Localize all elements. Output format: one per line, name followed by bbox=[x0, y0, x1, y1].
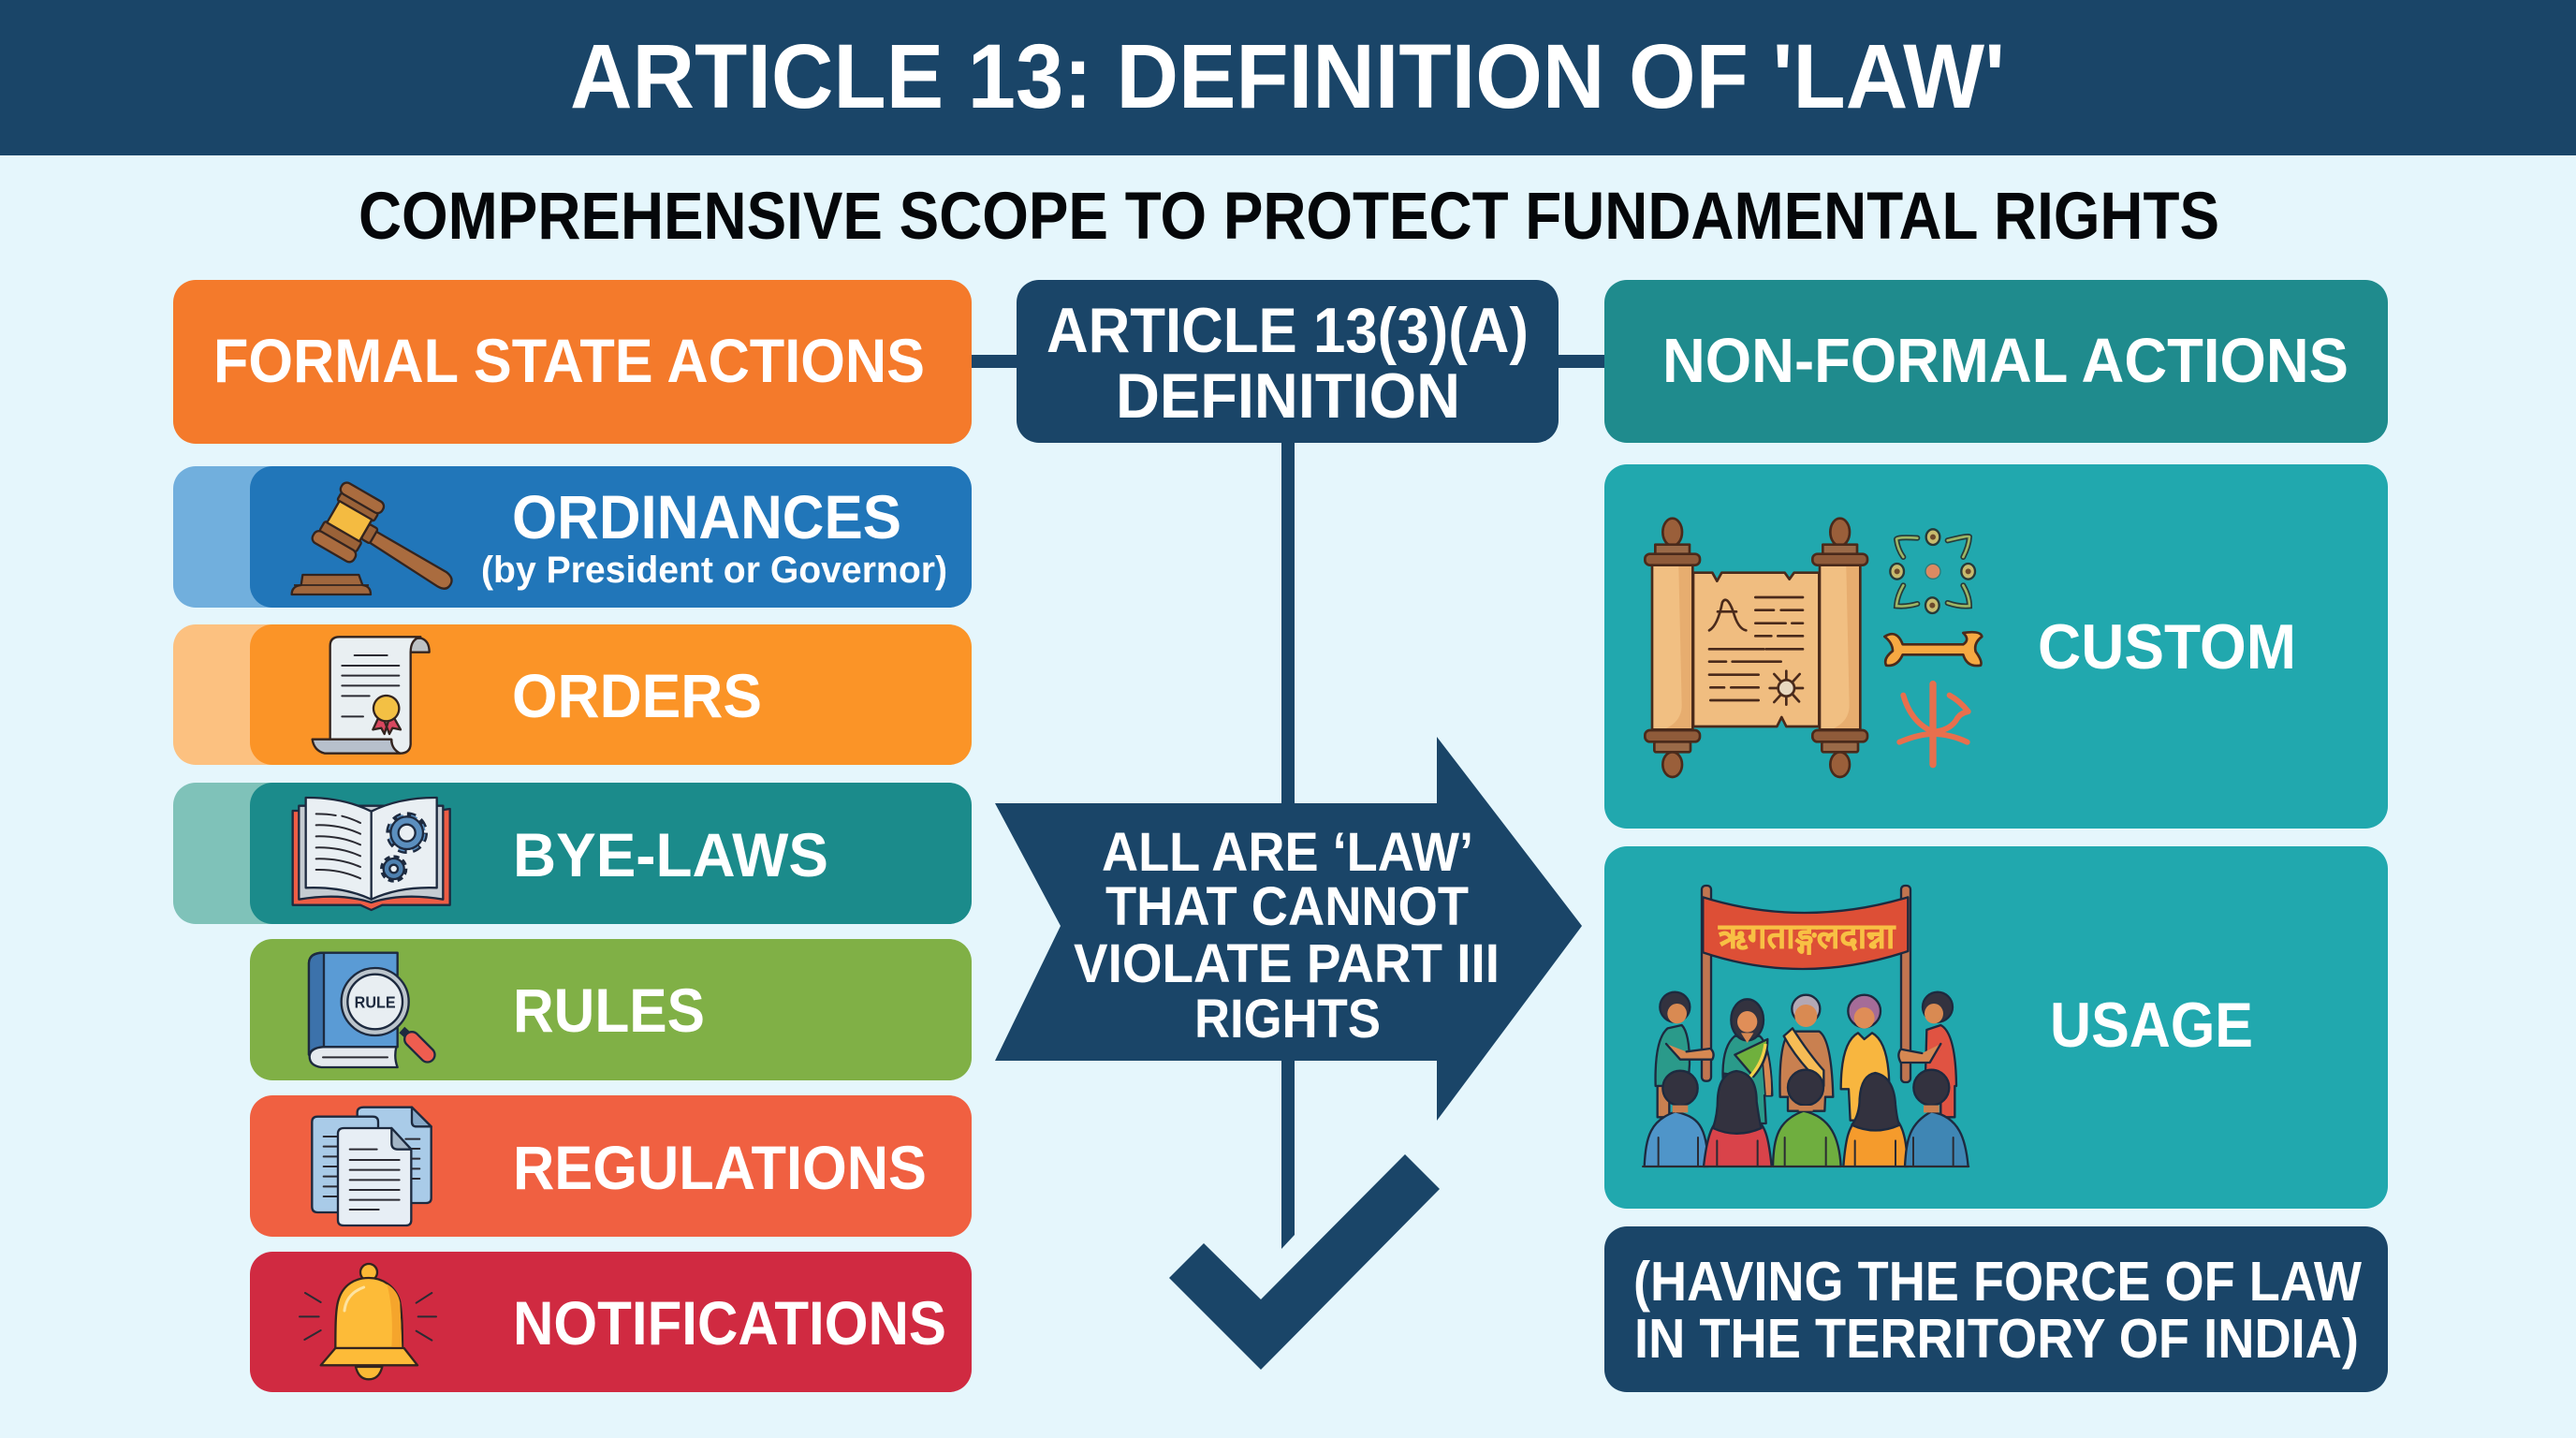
icon: certificate scroll bbox=[313, 637, 430, 754]
arrow: all are law: ALL ARE ‘LAW’ bbox=[1102, 822, 1473, 883]
panel: ordinances bbox=[173, 466, 972, 612]
panel: notifications bbox=[250, 1252, 972, 1392]
panel: bye-laws bbox=[173, 783, 972, 924]
panel: non-formal actions header bbox=[1604, 280, 2388, 443]
panel: formal state actions header: FORMAL STATE ACTIONS bbox=[213, 326, 925, 395]
panel: custom: CUSTOM bbox=[2038, 611, 2296, 682]
panel: having the force of law note bbox=[1604, 1226, 2388, 1392]
panel: article 13(3)(a) definition: DEFINITION bbox=[1116, 360, 1460, 432]
panel: regulations: REGULATIONS bbox=[513, 1133, 927, 1202]
icon: rule book and magnifier bbox=[309, 953, 428, 1067]
panel: orders: ORDERS bbox=[512, 661, 762, 730]
panel: article 13(3)(a) definition: ARTICLE 13(3)(A) bbox=[1046, 295, 1529, 366]
icon: rule book and magnifier: RULE bbox=[355, 993, 396, 1012]
panel: rules bbox=[250, 939, 972, 1080]
icon: ancient scroll with symbols bbox=[1645, 519, 1982, 777]
panel: usage bbox=[1604, 846, 2388, 1209]
icon: bell bbox=[300, 1264, 436, 1379]
icon: gavel bbox=[292, 480, 469, 612]
panel: custom bbox=[1604, 464, 2388, 829]
title banner: ARTICLE 13: DEFINITION OF 'LAW' bbox=[570, 25, 2005, 127]
panel: non-formal actions header: NON-FORMAL ACTIONS bbox=[1662, 326, 2349, 396]
panel: formal state actions header bbox=[173, 280, 972, 444]
panel: having the force of law note: (HAVING THE FORCE OF LAW bbox=[1633, 1251, 2362, 1313]
arrow: all are law: THAT CANNOT bbox=[1105, 876, 1469, 937]
panel: notifications: NOTIFICATIONS bbox=[513, 1288, 946, 1357]
arrow: all are law bbox=[995, 737, 1582, 1121]
title banner bbox=[0, 0, 2576, 155]
panel: usage: USAGE bbox=[2050, 990, 2253, 1061]
panel: ordinances: (by President or Governor) bbox=[481, 550, 947, 591]
panel: ordinances: ORDINANCES bbox=[512, 482, 901, 551]
panel: article 13(3)(a) definition bbox=[1017, 280, 1559, 443]
connector: center spine bbox=[970, 355, 1606, 1249]
arrow: all are law: VIOLATE PART III bbox=[1074, 933, 1500, 994]
icon: stacked documents bbox=[312, 1108, 432, 1225]
arrow: all are law: RIGHTS bbox=[1194, 989, 1381, 1049]
icon: checkmark bbox=[1169, 1154, 1440, 1370]
panel: rules: RULES bbox=[513, 976, 705, 1045]
panel: regulations bbox=[250, 1095, 972, 1237]
panel: having the force of law note: IN THE TERRITORY OF INDIA) bbox=[1634, 1308, 2359, 1370]
panel: bye-laws: BYE-LAWS bbox=[513, 820, 828, 889]
icon: community crowd with banner bbox=[1643, 886, 1969, 1167]
icon: open book with gears bbox=[293, 798, 450, 910]
icon: community crowd with banner: ऋगताङ्गलदान्ना bbox=[1718, 917, 1896, 956]
subtitle: COMPREHENSIVE SCOPE TO PROTECT FUNDAMENTAL RIGHTS bbox=[359, 180, 2219, 254]
panel: orders bbox=[173, 624, 972, 765]
